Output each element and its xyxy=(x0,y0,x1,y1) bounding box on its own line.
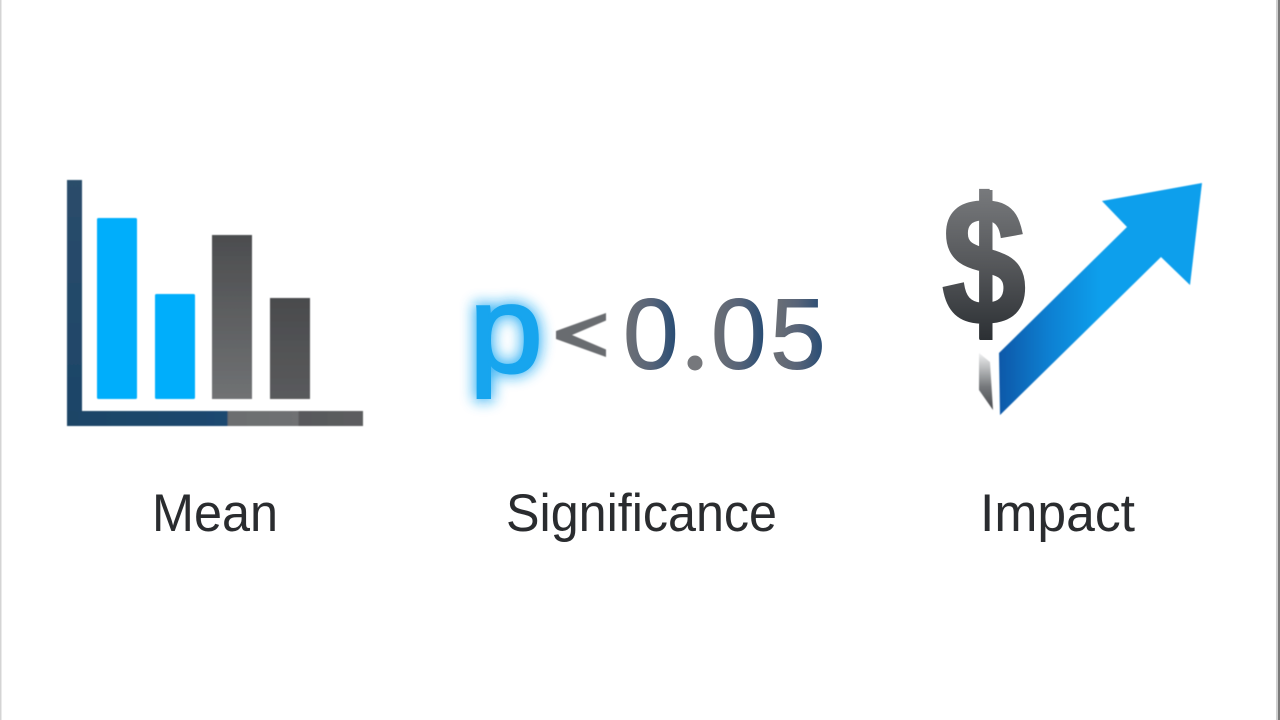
dollar sign: $ xyxy=(942,162,1026,363)
rising arrow xyxy=(999,183,1202,415)
decimal point xyxy=(688,356,702,370)
icon: dollar and rising arrow (Impact) xyxy=(942,162,1202,415)
icon: bar chart (Mean) xyxy=(67,180,363,426)
label: Mean: Mean xyxy=(152,484,278,543)
x axis xyxy=(67,411,363,426)
y axis xyxy=(67,180,82,426)
letter p: p xyxy=(469,261,543,399)
bar 2 xyxy=(155,294,195,399)
digit 0: 0 xyxy=(711,278,767,390)
dollar vertical stem xyxy=(980,190,992,340)
bar 1 xyxy=(97,218,137,399)
glow behind p: p xyxy=(469,261,543,399)
digit 0: 0 xyxy=(623,278,679,390)
icon: p < 0.05 significance formula xyxy=(469,261,826,399)
digit 5: 5 xyxy=(770,278,826,390)
less-than sign xyxy=(556,313,606,357)
label: Impact: Impact xyxy=(980,484,1135,543)
bar 4 xyxy=(270,298,310,399)
bar 3 xyxy=(212,235,252,399)
label: Significance: Significance xyxy=(506,484,777,543)
small stub under dollar xyxy=(979,353,993,410)
